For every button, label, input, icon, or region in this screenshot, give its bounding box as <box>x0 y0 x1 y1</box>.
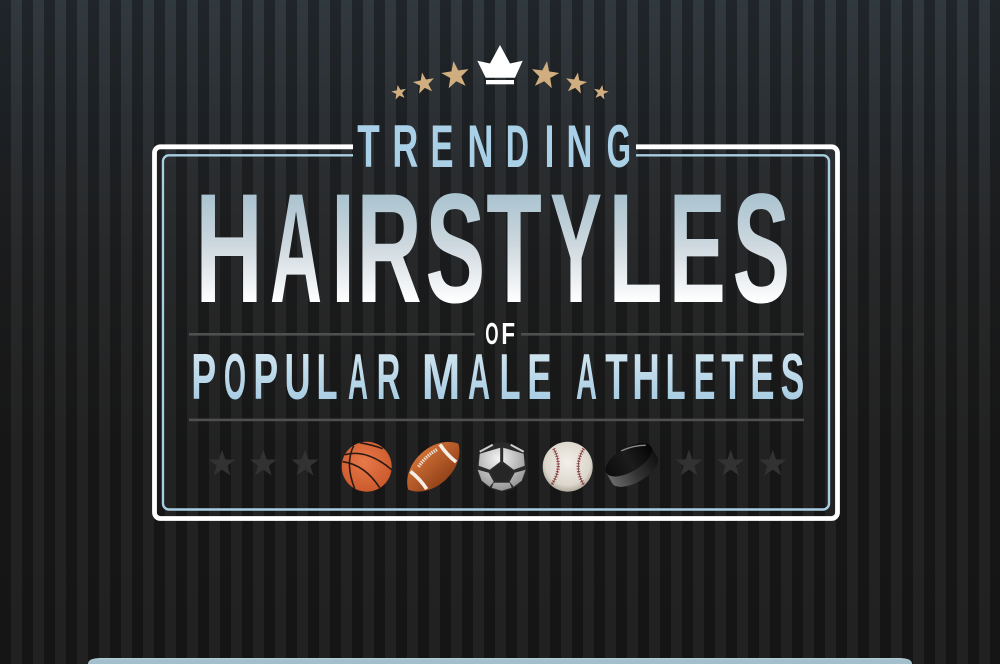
heading: HAIRSTYLES: Y <box>550 162 602 336</box>
heading: POPULAR MALE ATHLETES: H <box>632 340 660 413</box>
text: OF: O <box>485 316 499 351</box>
panel: content panel top edge <box>88 658 912 664</box>
gold stars arc <box>390 59 610 100</box>
inner blue frame <box>163 155 829 510</box>
heading: HAIRSTYLES: S <box>732 162 790 336</box>
heading: POPULAR MALE ATHLETES: E <box>750 340 775 413</box>
heading: POPULAR MALE ATHLETES: T <box>605 340 628 413</box>
heading: TRENDING: D <box>506 113 529 180</box>
icon: crown <box>477 45 523 84</box>
heading: POPULAR MALE ATHLETES: A <box>468 340 490 413</box>
heading: POPULAR MALE ATHLETES: E <box>527 340 552 413</box>
heading: POPULAR MALE ATHLETES: P <box>191 340 216 413</box>
heading: POPULAR MALE ATHLETES: A <box>348 340 368 413</box>
outer white frame <box>154 147 838 519</box>
heading: POPULAR MALE ATHLETES: S <box>781 340 804 413</box>
heading: POPULAR MALE ATHLETES: L <box>316 340 338 413</box>
heading: HAIRSTYLES: T <box>486 162 542 336</box>
heading: TRENDING: G <box>607 113 631 180</box>
heading: POPULAR MALE ATHLETES: L <box>666 340 686 413</box>
heading: HAIRSTYLES: A <box>270 162 322 336</box>
dark stars right <box>675 450 786 475</box>
heading: TRENDING: T <box>357 113 380 180</box>
heading: POPULAR MALE ATHLETES: E <box>694 340 715 413</box>
heading: POPULAR MALE ATHLETES: L <box>500 340 521 413</box>
icon: basketball <box>342 442 392 492</box>
heading: POPULAR MALE ATHLETES: P <box>253 340 278 413</box>
heading: HAIRSTYLES: R <box>356 162 422 336</box>
divider rules <box>189 333 804 421</box>
heading: HAIRSTYLES: E <box>669 162 726 336</box>
heading: POPULAR MALE ATHLETES: U <box>284 340 311 413</box>
icon: baseball <box>543 442 593 492</box>
heading: POPULAR MALE ATHLETES: A <box>576 340 597 413</box>
heading: TRENDING: N <box>566 113 592 180</box>
heading: TRENDING: E <box>430 113 454 180</box>
heading: POPULAR MALE ATHLETES: R <box>377 340 400 413</box>
heading: HAIRSTYLES: S <box>425 162 485 336</box>
icon: soccer ball <box>477 442 526 491</box>
heading: POPULAR MALE ATHLETES: M <box>422 340 460 413</box>
heading: TRENDING: R <box>392 113 418 180</box>
heading: TRENDING: N <box>467 113 494 180</box>
heading: POPULAR MALE ATHLETES: O <box>224 340 246 413</box>
heading: HAIRSTYLES: H <box>195 162 263 336</box>
heading: TRENDING: I <box>545 113 554 180</box>
heading: HAIRSTYLES: L <box>608 162 662 336</box>
heading: HAIRSTYLES: I <box>331 162 355 336</box>
heading: POPULAR MALE ATHLETES: T <box>721 340 744 413</box>
icon: hockey puck <box>600 436 663 494</box>
icon: football <box>396 430 471 503</box>
dark stars left <box>208 450 319 475</box>
text: OF: F <box>501 316 515 351</box>
